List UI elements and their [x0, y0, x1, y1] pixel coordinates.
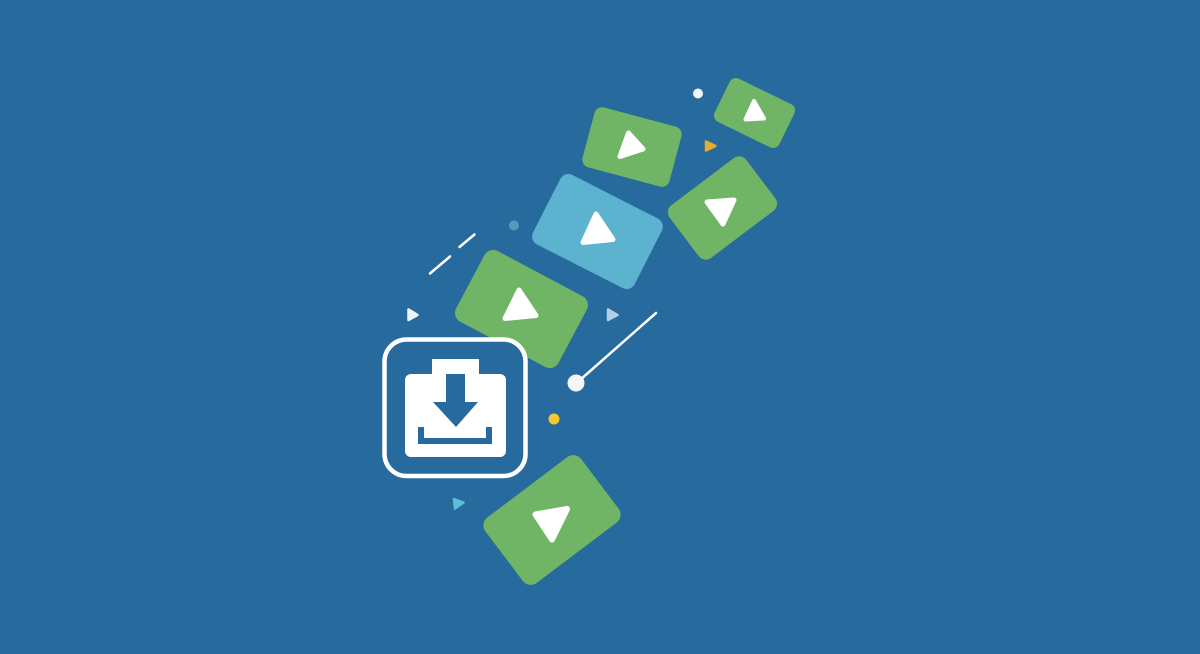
video card: bottom: [479, 451, 625, 589]
video card: blue highlighted: [529, 171, 666, 292]
video card: right: [664, 153, 781, 263]
motion dashes: [430, 234, 474, 274]
icon tray body: [405, 359, 506, 457]
dot: teal: [509, 220, 519, 230]
icon down arrow: [433, 374, 478, 427]
small triangle: white: [408, 310, 418, 320]
small triangle: teal: [454, 499, 464, 508]
icon: download box: [384, 340, 526, 476]
icon tray slot: [418, 427, 492, 444]
video card: top: [581, 105, 683, 189]
video card: middle: [452, 246, 591, 372]
connector line with node: [568, 313, 656, 392]
video card: top right small: [712, 76, 797, 150]
small triangle: light blue: [608, 310, 618, 320]
dot: yellow: [548, 414, 560, 424]
icon frame: [384, 340, 526, 476]
small triangle: orange: [706, 142, 716, 150]
dot: white: [693, 88, 703, 98]
